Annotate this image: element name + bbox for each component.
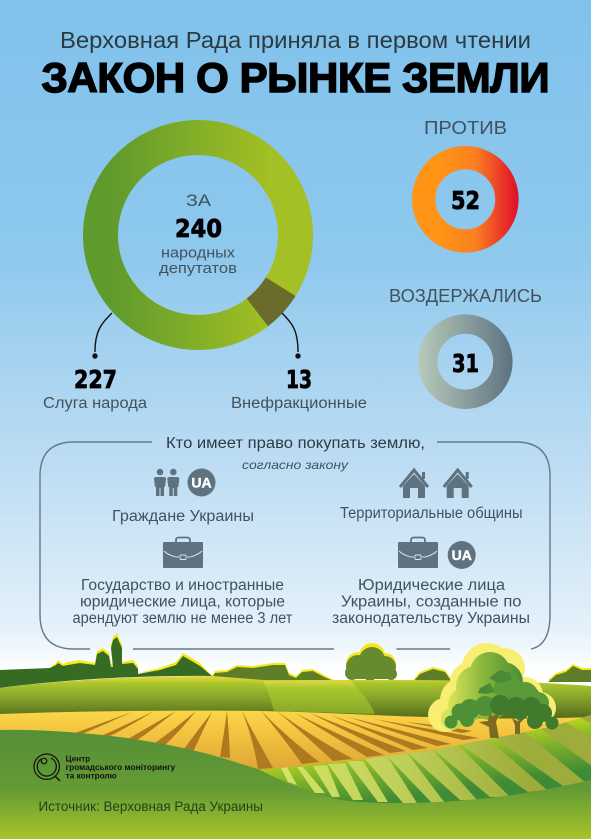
text: Ukrainian entities: Юридические лица	[358, 577, 505, 594]
against: ПРОТИВ	[424, 118, 507, 138]
panel outline	[40, 442, 550, 649]
subtitle: Верховная Рада приняла в первом чтении	[60, 27, 531, 53]
segment: non-faction	[247, 277, 296, 326]
text: state and foreign entities	[72, 577, 292, 627]
stat: 13: 13	[286, 365, 312, 394]
text: Ukrainian entities	[332, 577, 530, 627]
treeline halo	[50, 633, 591, 681]
donut chart: for votes	[100, 138, 296, 332]
stat: 227: Слуга народа	[43, 395, 147, 412]
icon: UA badge: UA	[191, 474, 212, 490]
icon: briefcase with UA	[398, 538, 476, 569]
label: for: ЗА	[186, 191, 212, 210]
stat: 13	[231, 365, 367, 412]
connector: Servant of the People	[92, 313, 112, 359]
icon: briefcase with UA: UA	[452, 547, 472, 563]
stat: 13: Внефракционные	[231, 395, 367, 412]
front hill	[0, 730, 591, 839]
logo mark	[34, 754, 60, 781]
furrows	[75, 711, 479, 769]
panel subheading: согласно закону	[242, 458, 349, 472]
stat: 227	[43, 365, 147, 412]
treeline: centre bushes	[210, 665, 336, 682]
against: 52	[451, 186, 480, 215]
source: Источник: Верховная Рада Украины	[38, 799, 263, 814]
text: communities: Территориальные общины	[340, 505, 522, 522]
middle field	[0, 676, 591, 725]
tree trunks	[479, 710, 525, 738]
donut: against	[424, 158, 507, 241]
yellow ploughed field	[0, 711, 591, 815]
big tree	[428, 643, 558, 738]
treeline: small bushes	[413, 669, 452, 682]
logo text: громадського моніторингу	[66, 763, 176, 772]
tree mid foliage	[494, 674, 549, 714]
logo text: Центр	[66, 754, 90, 764]
icon: people	[154, 469, 179, 496]
icon: houses	[400, 470, 472, 498]
tree dark foliage	[444, 670, 558, 730]
panel heading: Кто имеет право покупать землю,	[166, 435, 425, 452]
abstained: ВОЗДЕРЖАЛИСЬ	[389, 286, 542, 306]
text: state and foreign entities: арендуют землю не менее 3 лет	[72, 610, 292, 627]
text: Ukrainian entities: Украины, созданные по	[341, 594, 522, 610]
far dark hill with left treeline	[0, 637, 212, 688]
icon: briefcase	[163, 538, 203, 568]
tree crown	[441, 652, 541, 730]
abstained: 31	[452, 349, 479, 378]
text: state and foreign entities: Государство и иностранные	[81, 577, 284, 594]
abstained	[389, 286, 542, 399]
text: state and foreign entities: юридические лица, которые	[80, 594, 285, 610]
text: citizens: Граждане Украины	[112, 508, 254, 525]
label: deputies: депутатов	[159, 260, 237, 277]
landscape illustration	[0, 633, 591, 839]
number: 240: 240	[175, 214, 222, 243]
text: Ukrainian entities: законодательству Украины	[332, 610, 530, 627]
treeline: single tree	[345, 647, 397, 688]
donut: abstained	[428, 324, 503, 399]
logo text: та контролю	[66, 772, 117, 780]
treeline: right bushes	[548, 666, 591, 682]
against	[424, 118, 507, 241]
panel: who can buy land	[40, 435, 550, 649]
tree halo	[428, 643, 556, 732]
striped field	[260, 715, 591, 803]
connector: non-faction	[282, 313, 301, 359]
logo	[34, 754, 176, 781]
title: ЗАКОН О РЫНКЕ ЗЕМЛИ	[42, 54, 550, 101]
bright field patch	[263, 680, 375, 714]
label: deputies	[159, 244, 237, 277]
icon: UA badge	[188, 468, 216, 496]
logo text	[66, 754, 176, 780]
label: deputies: народных	[161, 244, 236, 262]
stat: 227: 227	[74, 365, 117, 394]
